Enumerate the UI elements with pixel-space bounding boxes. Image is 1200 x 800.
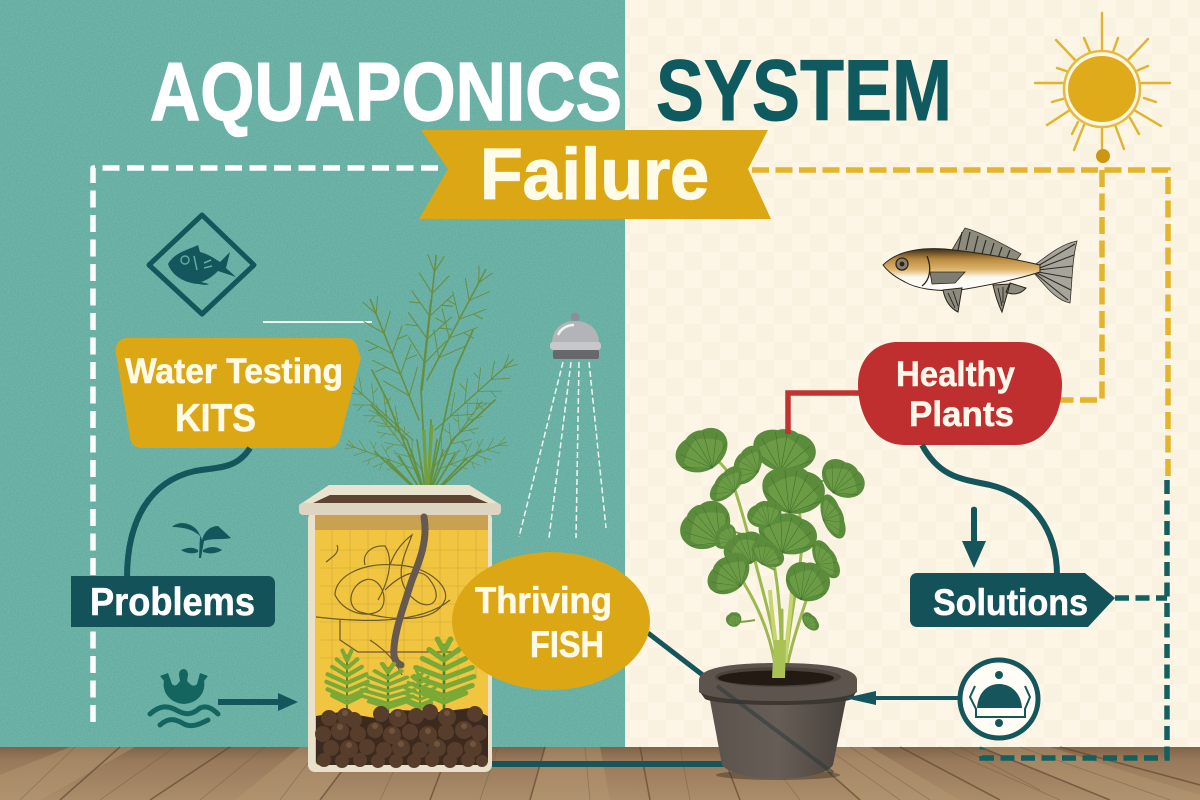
callout: Healthy Plants	[858, 342, 1062, 445]
label: Solutions: Solutions	[933, 582, 1088, 623]
pot plant: leafy herb	[668, 419, 872, 672]
callout: Water Testing KITS: KITS	[175, 397, 256, 440]
illustration: realistic fish	[883, 228, 1077, 312]
label: Problems: Problems	[90, 581, 255, 624]
arrow: icon to pot	[845, 691, 960, 705]
icon: shower head	[519, 312, 606, 538]
connector: tank to pot pipe	[492, 761, 725, 767]
icon: seedling	[172, 523, 231, 558]
plant pot	[699, 640, 857, 780]
connector: curve to Solutions	[922, 445, 1057, 575]
panel: cream background	[625, 0, 1200, 750]
callout: Water Testing KITS: Water Testing	[125, 352, 343, 391]
callout: Healthy Plants: Healthy	[896, 355, 1015, 394]
panel: teal background	[0, 0, 625, 750]
title: AQUAPONICS: AQUAPONICS	[150, 45, 622, 138]
icon: cloche circle	[960, 660, 1038, 738]
icon: sun	[1035, 13, 1170, 163]
callout: Healthy Plants: Plants	[909, 395, 1014, 434]
connector: red line to plant	[788, 393, 860, 434]
title: SYSTEM: SYSTEM	[656, 43, 952, 139]
arrow: water to tank	[218, 693, 298, 711]
connector: curve to Problems	[127, 448, 250, 578]
callout: Thriving FISH: Thriving	[475, 580, 612, 621]
icon: water crown	[150, 669, 218, 726]
connector: white dashed line	[93, 168, 438, 728]
callout: Thriving FISH	[452, 552, 650, 690]
arrow: down to Solutions	[962, 507, 986, 568]
banner: Failure: Failure	[480, 135, 709, 215]
decorative label line	[263, 321, 372, 323]
banner: Failure	[419, 130, 771, 219]
connector: teal dashed line	[982, 480, 1167, 758]
plant: dill fronds	[332, 253, 525, 502]
connector: gold dashed line	[752, 170, 1168, 480]
tank: grow bed with plants and pebbles	[299, 485, 501, 772]
callout: Water Testing KITS	[116, 338, 361, 448]
callout: Thriving FISH: FISH	[530, 624, 604, 665]
icon: fish in diamond	[149, 215, 254, 314]
label: Solutions	[910, 573, 1115, 627]
connector: Thriving Fish to pot	[648, 633, 717, 686]
wooden floor	[0, 747, 1200, 800]
